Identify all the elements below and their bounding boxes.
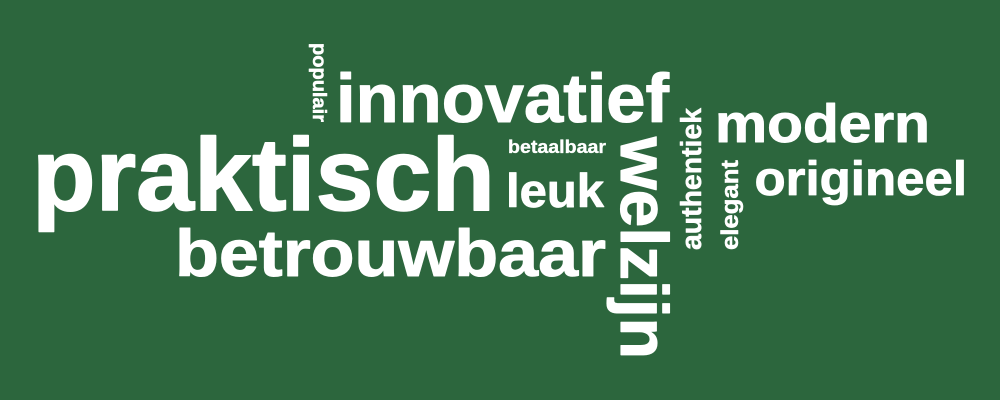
- word: authentiek: authentiek: [676, 107, 708, 250]
- word: elegant: elegant: [717, 160, 744, 250]
- word: betaalbaar: betaalbaar: [508, 137, 606, 157]
- word: praktisch: praktisch: [32, 117, 495, 232]
- word: modern: modern: [715, 94, 930, 154]
- word: welzijn: welzijn: [606, 136, 681, 359]
- word: innovatief: innovatief: [336, 60, 670, 137]
- word: origineel: origineel: [754, 153, 967, 206]
- word: populair: populair: [308, 43, 329, 123]
- word: leuk: leuk: [506, 164, 605, 217]
- word: betrouwbaar: betrouwbaar: [175, 216, 606, 290]
